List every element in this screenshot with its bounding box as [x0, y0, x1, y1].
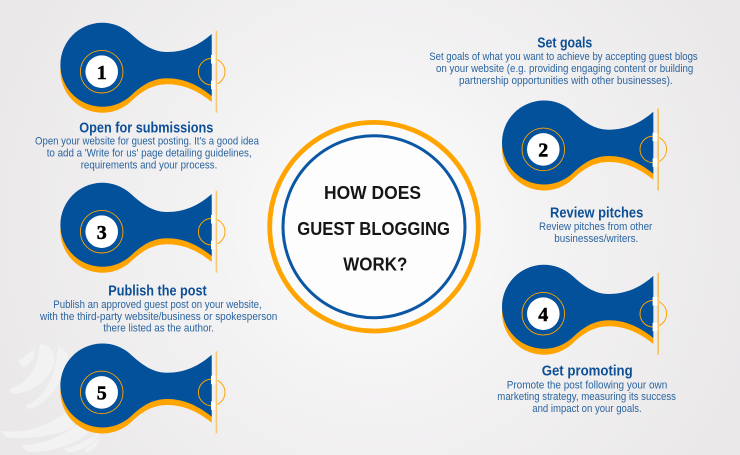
- icon: step 1 badge: 1: [97, 62, 107, 84]
- text block: step 5 get promoting: and impact on your goals.: [532, 403, 642, 415]
- icon: step 3 badge: 3: [97, 222, 107, 244]
- text block: step 2 set goals: on your website (e.g. providing engaging content or building: [436, 63, 693, 75]
- text block: step 4 review pitches: Review pitches: [550, 206, 643, 222]
- text block: step 2 set goals: Set goals: [537, 36, 592, 52]
- panel: central title circle: HOW DOES: [324, 183, 421, 203]
- text block: step 5 get promoting: marketing strategy, measuring its success: [497, 391, 676, 403]
- icon: step 3 badge: [60, 183, 225, 273]
- text block: step 3 publish the post: Publish the post: [108, 284, 207, 300]
- decorative swoosh: [0, 344, 101, 453]
- text block: step 5 get promoting: Promote the post following your own: [507, 379, 667, 391]
- text block: step 5 get promoting: [497, 364, 676, 415]
- text block: step 4 review pitches: Review pitches from other: [539, 221, 653, 233]
- text block: step 1 open for submissions: [35, 120, 260, 172]
- text block: step 1 open for submissions: Open for submissions: [79, 120, 213, 136]
- text block: step 4 review pitches: [539, 206, 653, 245]
- panel: central title circle: [270, 122, 478, 331]
- icon: step 2 badge: [502, 100, 667, 190]
- text block: step 1 open for submissions: requirements and your process.: [81, 160, 217, 172]
- panel: central title circle: WORK?: [343, 255, 407, 275]
- icon: step 1 badge: [60, 23, 225, 113]
- icon: step 5 badge: [60, 343, 225, 433]
- text block: step 2 set goals: [429, 36, 698, 87]
- text block: step 3 publish the post: with the third-party website/business or spokesperson: [39, 311, 277, 323]
- text block: step 3 publish the post: there listed as the author.: [103, 323, 214, 335]
- text block: step 1 open for submissions: to add a 'Write for us' page detailing guidelines,: [47, 148, 252, 160]
- icon: step 2 badge: 2: [538, 140, 548, 162]
- text block: step 5 get promoting: Get promoting: [542, 364, 633, 380]
- text block: step 3 publish the post: Publish an approved guest post on your website,: [53, 299, 262, 311]
- icon: step 4 badge: 4: [538, 304, 548, 326]
- text block: step 2 set goals: Set goals of what you want to achieve by accepting guest blogs: [429, 51, 698, 63]
- text block: step 2 set goals: partnership opportunities with other businesses).: [459, 75, 673, 87]
- icon: step 5 badge: 5: [97, 383, 107, 405]
- icon: step 4 badge: [502, 265, 667, 355]
- panel: central title circle: GUEST BLOGGING: [297, 219, 450, 239]
- text block: step 3 publish the post: [39, 284, 277, 335]
- text block: step 4 review pitches: businesses/writers.: [554, 233, 638, 245]
- text block: step 1 open for submissions: Open your website for guest posting. It's a good idea: [35, 136, 260, 148]
